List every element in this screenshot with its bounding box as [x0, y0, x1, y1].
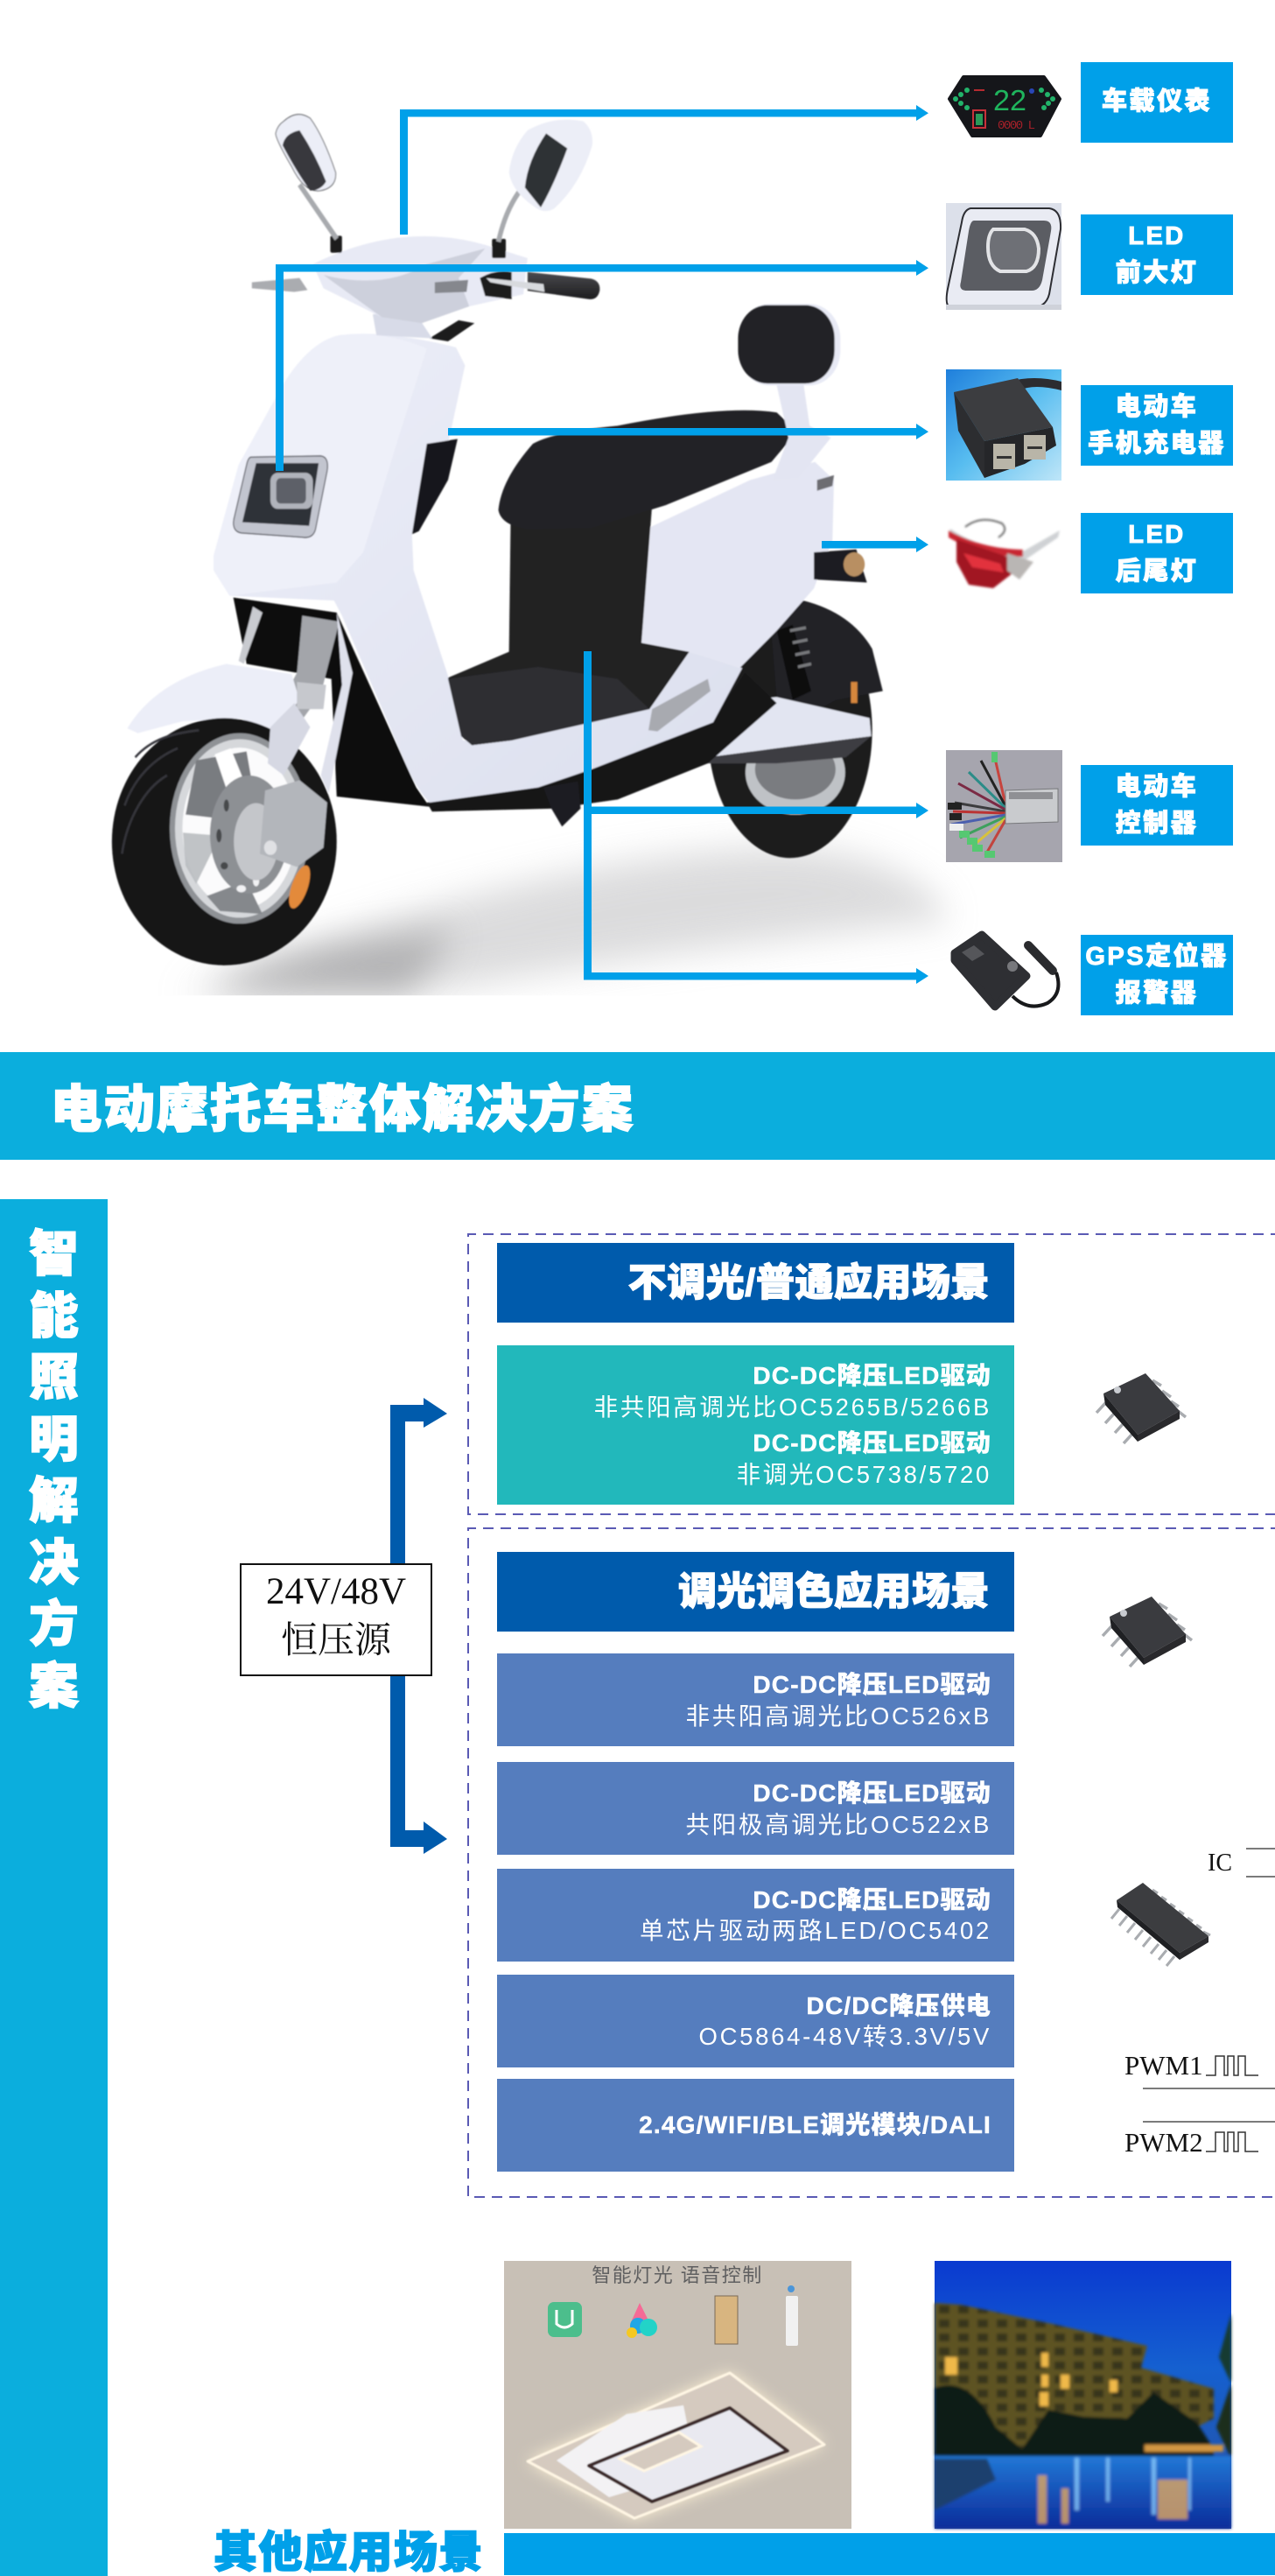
label: LED 后尾灯 — [1081, 513, 1233, 593]
panel: OC5864: OC5864-48V转3.3V/5V — [699, 2023, 991, 2050]
scooter body — [214, 333, 742, 803]
panel: no-dimming drivers: DC-DC降压LED驱动 — [753, 1362, 991, 1389]
icon: SOP8 chip 2 — [1101, 1597, 1193, 1667]
side column: vertical heading: 智 — [30, 1226, 79, 1281]
panel: no-dimming drivers: 非调光OC5738/5720 — [736, 1461, 991, 1488]
label: 电动车手机充电器: 电动车 — [1116, 393, 1198, 421]
side column: vertical heading: 能 — [30, 1288, 79, 1343]
heading: dimming scenario: 调光调色应用场景 — [678, 1570, 990, 1613]
dashed frame: dimming group — [467, 1527, 1275, 2198]
side column: vertical heading — [0, 1199, 108, 2576]
icon: instrument meter photo: 22 — [993, 84, 1026, 116]
heading: other application scenarios: 其他应用场景 — [214, 2528, 484, 2576]
panel: wireless modules: 2.4G/WIFI/BLE调光模块/DALI — [639, 2111, 991, 2138]
side column: vertical heading: 照 — [30, 1350, 79, 1405]
power source box — [240, 1563, 432, 1676]
label: 电动车控制器: 控制器 — [1116, 810, 1198, 838]
icon: GPS tracker photo — [950, 931, 1061, 1010]
panel: OC522xB: DC-DC降压LED驱动 — [753, 1779, 991, 1807]
power source box: 恒压源 — [281, 1621, 391, 1661]
label: GPS定位器报警器 — [1081, 935, 1233, 1015]
panel: OC5402: 单芯片驱动两路LED/OC5402 — [640, 1917, 991, 1944]
heading: no-dimming scenario: 不调光/普通应用场景 — [628, 1261, 990, 1304]
label: LED 前大灯: 前大灯 — [1116, 259, 1198, 287]
arrow: to controller and GPS alarm — [584, 651, 928, 984]
console and handlebars — [373, 314, 432, 339]
label: PWM2 with waveform — [1124, 2121, 1275, 2158]
label: LED 前大灯: LED — [1128, 222, 1186, 250]
label: GPS定位器报警器: 报警器 — [1116, 979, 1198, 1007]
panel: OC5402: DC-DC降压LED驱动 — [753, 1886, 991, 1913]
photo: hotel at night — [932, 2261, 1234, 2531]
arrow: power source to both groups — [390, 1398, 447, 1854]
label: 电动车控制器 — [1081, 765, 1233, 846]
panel: no-dimming drivers: 非共阳高调光比OC5265B/5266B — [594, 1393, 991, 1421]
panel: OC526xB: DC-DC降压LED驱动 — [753, 1671, 991, 1698]
panel: OC5864: DC/DC降压供电 — [807, 1992, 991, 2019]
label: 电动车手机充电器: 手机充电器 — [1088, 430, 1226, 458]
side column: vertical heading: 解 — [30, 1473, 79, 1528]
heading: no-dimming scenario — [497, 1243, 1014, 1323]
section banner: title: 电动摩托车整体解决方案 — [51, 1081, 635, 1138]
label: IC: IC — [1208, 1850, 1232, 1877]
fender and fork — [268, 615, 340, 745]
panel: OC526xB: 非共阳高调光比OC526xB — [685, 1702, 991, 1730]
panel: OC526xB — [497, 1653, 1014, 1746]
panel: wireless modules — [497, 2079, 1014, 2172]
label: 车载仪表 — [1081, 62, 1233, 143]
panel: OC5402 — [497, 1869, 1014, 1962]
label: 电动车控制器: 电动车 — [1116, 773, 1198, 801]
icon: SOP16 chip — [1110, 1883, 1211, 1967]
side column: vertical heading: 方 — [30, 1597, 79, 1652]
frame underside — [234, 598, 430, 807]
label: LED 后尾灯: 后尾灯 — [1116, 558, 1198, 586]
wire: IC outputs — [1246, 1848, 1275, 1878]
mirrors — [276, 115, 592, 242]
heading: dimming scenario — [497, 1552, 1014, 1632]
shadow — [178, 848, 952, 995]
photo: smart ceiling lamp: 智能灯光 语音控制 — [592, 2264, 763, 2286]
backrest — [773, 381, 830, 480]
label: LED 后尾灯: LED — [1128, 521, 1186, 549]
label: 车载仪表: 车载仪表 — [1102, 88, 1212, 116]
label: LED 前大灯 — [1081, 214, 1233, 295]
side column: vertical heading: 案 — [30, 1658, 79, 1714]
rear panel — [641, 462, 834, 668]
panel: OC5864 — [497, 1975, 1014, 2067]
label: PWM1 with waveform: PWM1 — [1124, 2050, 1203, 2081]
illustration: white electric scooter — [110, 113, 947, 996]
bottom bar — [504, 2533, 1275, 2575]
seat — [499, 411, 797, 530]
icon: SOP8 chip 1 — [1096, 1373, 1187, 1444]
side column: vertical heading: 决 — [30, 1535, 79, 1590]
icon: phone charger photo — [946, 369, 1061, 481]
icon: LED tail light photo — [947, 517, 1061, 590]
arrow: to LED headlight — [276, 260, 928, 471]
front wheel — [112, 703, 337, 965]
dashed frame: no-dimming group — [467, 1233, 1275, 1515]
headlight — [234, 456, 327, 537]
under seat storage — [448, 504, 690, 745]
arrow: to phone charger — [448, 424, 928, 439]
tail — [814, 550, 867, 582]
label: PWM2 with waveform: PWM2 — [1124, 2127, 1203, 2158]
label: GPS定位器报警器: GPS定位器 — [1085, 943, 1229, 971]
photo: smart ceiling lamp — [504, 2261, 851, 2529]
panel: OC522xB: 共阳极高调光比OC522xB — [685, 1811, 991, 1838]
arrow: to instrument meter — [400, 105, 928, 235]
label: PWM1 with waveform — [1124, 2050, 1275, 2089]
rear wheel — [705, 600, 883, 858]
label: 电动车手机充电器 — [1081, 385, 1233, 466]
section banner: title — [0, 1052, 1275, 1160]
panel: OC522xB — [497, 1762, 1014, 1855]
panel: no-dimming drivers — [497, 1345, 1014, 1505]
arrow: to LED tail light — [822, 537, 928, 552]
icon: instrument meter photo — [948, 75, 1061, 137]
power source box: 24V/48V — [266, 1571, 406, 1612]
icon: instrument meter photo: 0000 L — [998, 119, 1035, 133]
icon: controller photo — [946, 750, 1062, 862]
panel: no-dimming drivers: DC-DC降压LED驱动 — [753, 1429, 991, 1456]
icon: LED headlight photo — [945, 203, 1062, 310]
side column: vertical heading: 明 — [30, 1411, 79, 1467]
